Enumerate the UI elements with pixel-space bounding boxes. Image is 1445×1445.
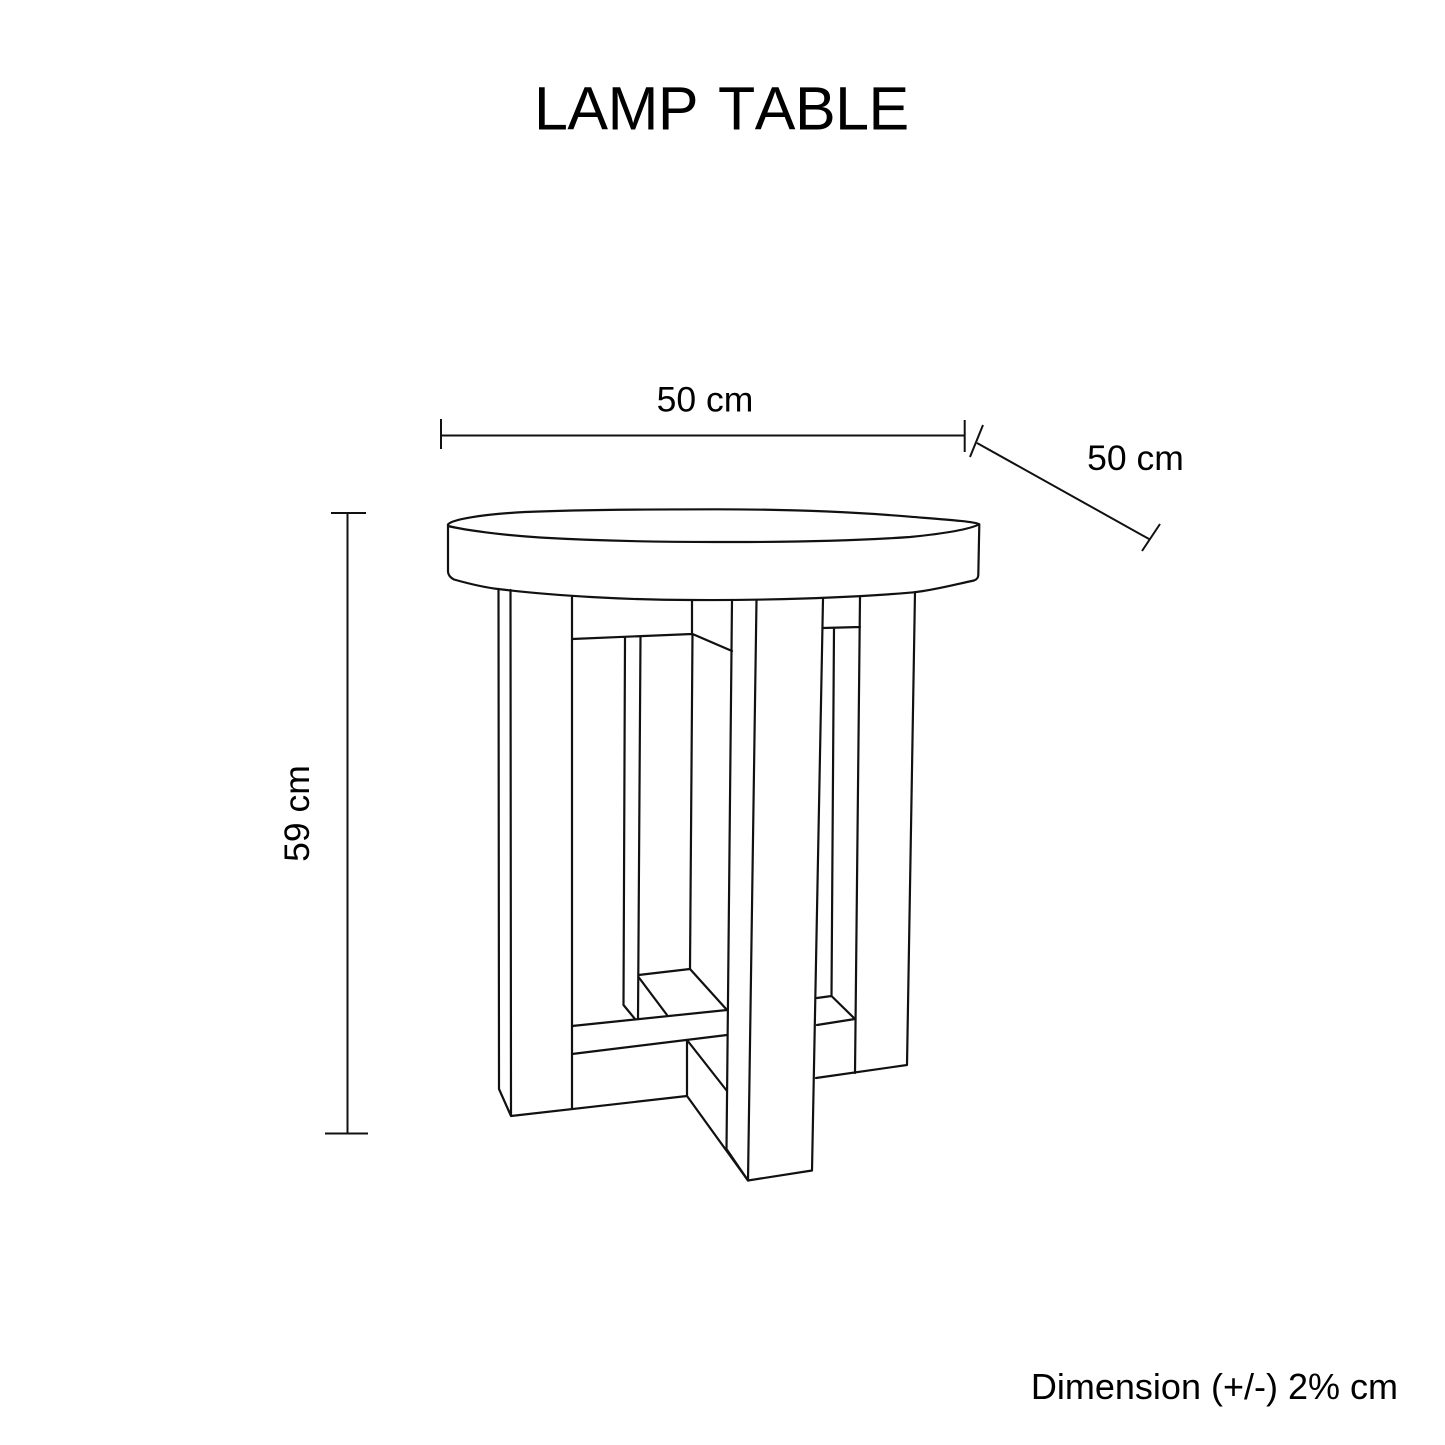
- depth dimension: line and label: 50 cm: [1087, 438, 1184, 478]
- height dimension: line and label: [277, 513, 368, 1134]
- right leg: [816, 592, 915, 1078]
- title: TABLE: [718, 74, 909, 142]
- shelf between legs: [638, 969, 727, 1015]
- title: LAMP: [534, 74, 698, 142]
- far left leg: [498, 589, 687, 1116]
- depth dimension: line and label: [970, 425, 1184, 551]
- dimension tolerance note: Dimension (+/-) 2% cm: [1031, 1366, 1398, 1407]
- left inner rail and back leg: [572, 600, 732, 1019]
- width dimension: line and label: [441, 380, 965, 452]
- width dimension: line and label: 50 cm: [657, 380, 753, 420]
- front cross stretcher: [572, 1010, 727, 1054]
- back foot: [687, 1040, 748, 1180]
- front leg: [726, 599, 823, 1180]
- lamp table line drawing: [448, 509, 979, 1180]
- height dimension: line and label: 59 cm: [277, 765, 317, 862]
- table top: [448, 509, 979, 600]
